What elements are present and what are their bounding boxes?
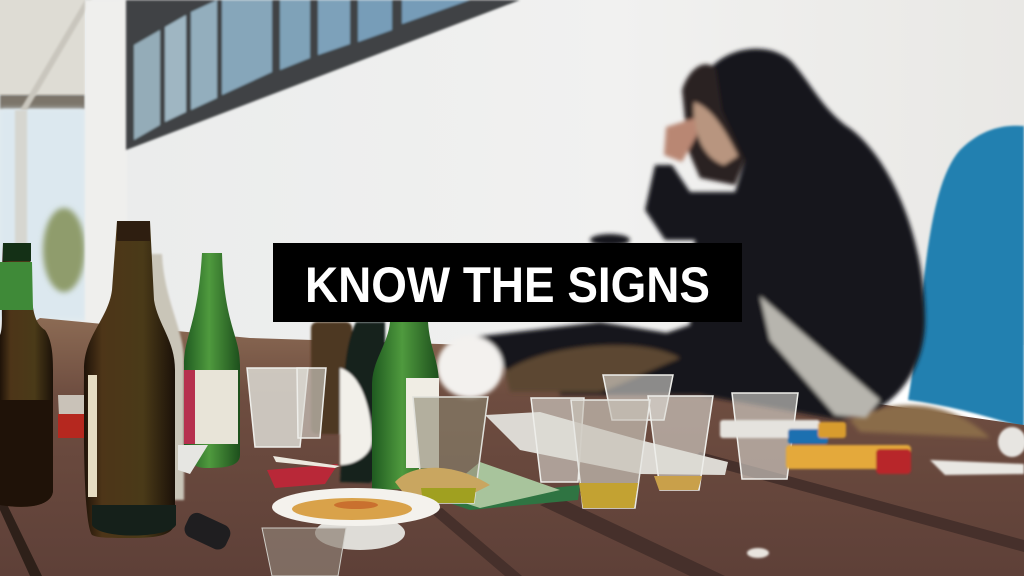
- deck floor: [0, 318, 1024, 576]
- cups on deck: [247, 368, 798, 490]
- small cup front: [262, 528, 346, 576]
- bowl and napkin: [58, 395, 340, 553]
- person in black hoodie: [437, 49, 925, 420]
- papers and mat: [440, 412, 728, 510]
- title banner: KNOW THE SIGNS: [305, 257, 710, 313]
- left brown bottle: [0, 243, 53, 507]
- plastic cup with yellow drink center: [571, 400, 702, 508]
- tall amber bottle: [84, 221, 176, 538]
- background wall: [0, 0, 1024, 345]
- lighter and tubes: [720, 420, 1024, 558]
- cup with chips: [395, 397, 490, 503]
- blue board: [908, 126, 1024, 428]
- clear bottle: [150, 254, 184, 500]
- green bottle center: [372, 322, 439, 490]
- green bottle left: [184, 253, 240, 468]
- back bottles: [311, 322, 385, 483]
- plate with food: [272, 488, 440, 550]
- title banner: [273, 243, 742, 322]
- windows: [126, 0, 520, 150]
